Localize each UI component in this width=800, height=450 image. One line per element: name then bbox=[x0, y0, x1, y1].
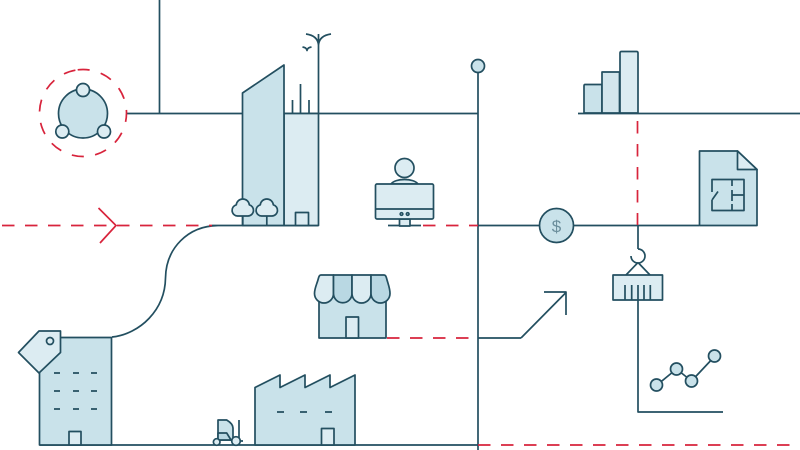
icon: bar chart bbox=[584, 52, 638, 113]
icon: forklift bbox=[213, 420, 243, 445]
icon: growth arrow bbox=[521, 292, 566, 338]
price tag bbox=[18, 331, 60, 373]
dashed route: inbound with arrow bbox=[2, 208, 212, 243]
icon: line chart bbox=[650, 350, 720, 391]
icon: warehouse with price tag bbox=[18, 331, 112, 445]
icon: office towers with trees bbox=[232, 34, 331, 226]
dashed route: bar chart to hub bbox=[636, 121, 638, 225]
tree left bbox=[232, 199, 254, 226]
icon: network node with dashed ring bbox=[35, 65, 131, 161]
icon: crane hook and container bbox=[613, 249, 662, 300]
icon: trunk line top node bbox=[472, 60, 484, 72]
icon: store front bbox=[314, 275, 390, 338]
dollar sign: $ bbox=[552, 217, 562, 236]
icon: factory bbox=[255, 375, 355, 445]
dashed route: outbound bottom bbox=[478, 444, 800, 446]
dashed route: store to trunk bbox=[387, 337, 478, 339]
dashed route: monitor to trunk bbox=[423, 224, 478, 226]
icon: floor plan document bbox=[700, 151, 757, 226]
tree right bbox=[256, 199, 278, 226]
icon: dollar coin bbox=[540, 208, 574, 242]
icon: person at monitor bbox=[376, 158, 434, 226]
